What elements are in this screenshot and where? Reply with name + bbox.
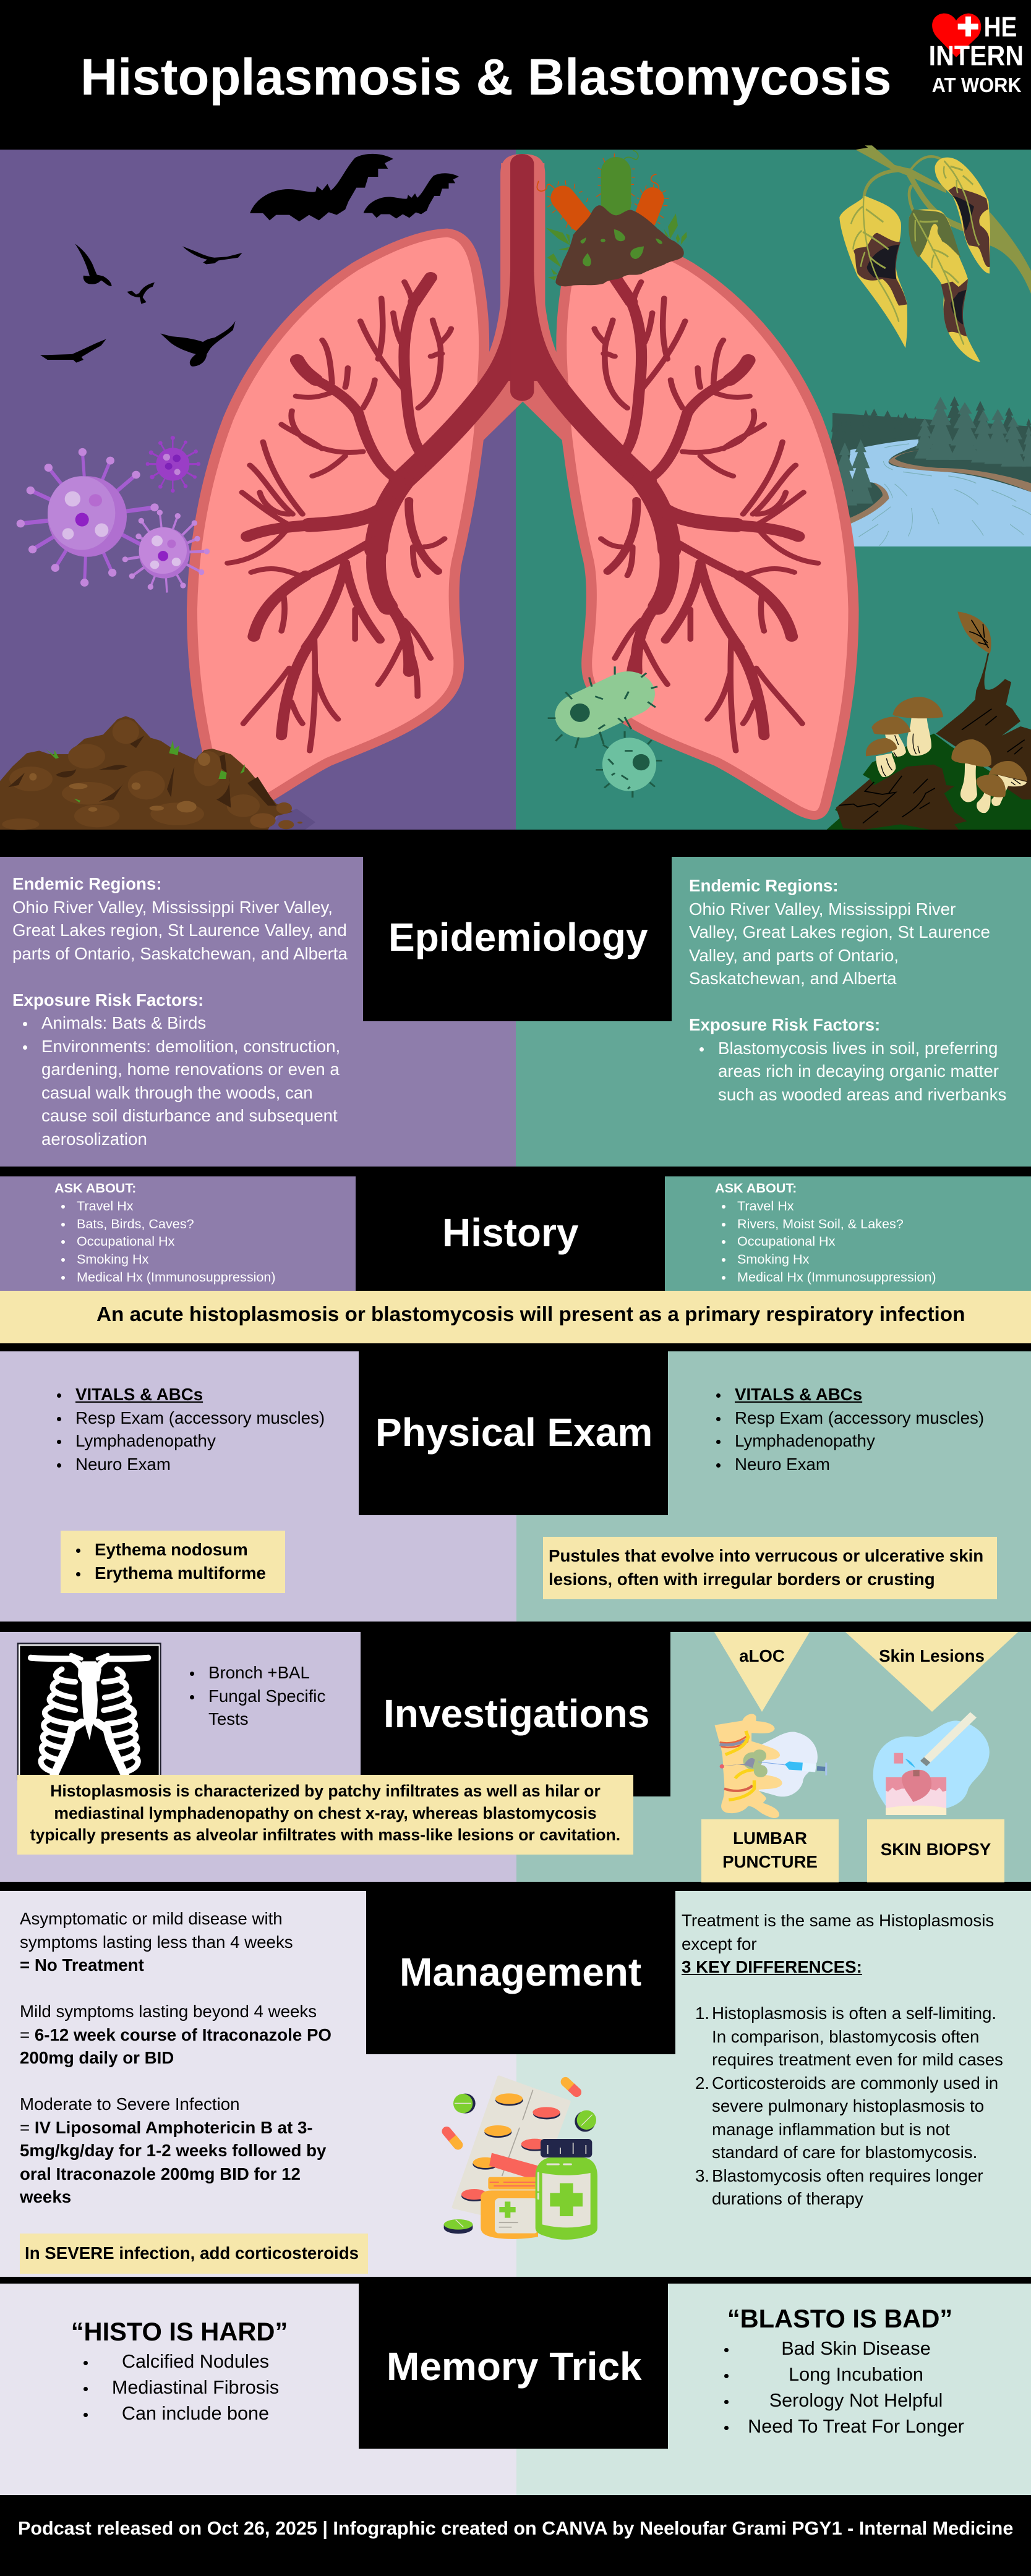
list: bronch and fungal tests (190, 1663, 325, 1728)
callout: histoplasmosis skin: Eythema nodosum (95, 1540, 248, 1559)
mushrooms on log (827, 611, 1031, 830)
teal bacterium round (596, 731, 662, 797)
trachea (511, 164, 533, 391)
grass tufts (46, 740, 245, 802)
heading: Investigations: Investigations (383, 1691, 649, 1736)
trachea sheath (500, 154, 545, 305)
list: Blasto is bad: Serology Not Helpful (769, 2390, 943, 2411)
list: physical exam right: Neuro Exam (735, 1454, 830, 1474)
panel: memory trick right (516, 2284, 1031, 2495)
orange bacterium left (563, 198, 580, 219)
text: histoplasmosis management: 5mg/kg/day for 1-2 weeks followed by (20, 2141, 326, 2160)
green bacterium (571, 172, 661, 204)
text: epidemiology histoplasmosis: cause soil disturbance and subsequent (41, 1106, 338, 1125)
logo: The Intern at Work (929, 11, 1024, 97)
icon: chest x-ray (17, 1643, 161, 1780)
text: epidemiology blastomycosis: Blastomycosis lives in soil, preferring (718, 1039, 998, 1057)
text: epidemiology blastomycosis: Exposure Risk Factors: (689, 1015, 880, 1034)
box: Lumbar Puncture: PUNCTURE (722, 1852, 818, 1871)
left lung body (192, 233, 484, 815)
heading box: Investigations (361, 1632, 670, 1796)
callout: blastomycosis skin: lesions, often with irregular borders or crusting (549, 1569, 935, 1589)
panel: memory trick left (0, 2284, 516, 2495)
text: epidemiology histoplasmosis: Animals: Bats & Birds (41, 1013, 206, 1032)
text: epidemiology histoplasmosis (12, 874, 348, 1149)
orange pill bottle (488, 2177, 537, 2190)
text: histoplasmosis management: Asymptomatic or mild disease with (20, 1909, 283, 1928)
heading box: History (356, 1176, 665, 1291)
third virus (122, 509, 210, 593)
list: physical exam right: Lymphadenopathy (735, 1431, 875, 1450)
footer: Podcast released on Oct 26, 2025 | Infographic created on CANVA by Neeloufar Grami PGY1 - Internal Medicine (18, 2518, 1013, 2539)
panel: epidemiology left (0, 857, 516, 1167)
text: history histoplasmosis: Travel Hx (77, 1198, 134, 1214)
text: epidemiology histoplasmosis: casual walk through the woods, can (41, 1083, 313, 1102)
panel: investigations left (0, 1632, 516, 1882)
heading box: Memory Trick (359, 2284, 668, 2449)
heading: Memory Trick: Memory Trick (387, 2344, 642, 2389)
callout: severe infection: In SEVERE infection, add corticosteroids (25, 2243, 359, 2263)
birds and viruses (17, 244, 242, 593)
birds (40, 244, 242, 367)
list: physical exam right (716, 1385, 984, 1474)
text: histoplasmosis management: = No Treatment (20, 1955, 144, 1975)
box: Lumbar Puncture (701, 1819, 839, 1882)
text: epidemiology blastomycosis (689, 876, 1006, 1104)
list: Histo is hard: Mediastinal Fibrosis (112, 2377, 279, 2398)
list: physical exam right: VITALS & ABCs (735, 1385, 862, 1404)
heading box: Epidemiology (363, 857, 672, 1021)
text: histoplasmosis management: weeks (20, 2187, 71, 2206)
bats (250, 154, 459, 221)
list: Histo is hard: Calcified Nodules (122, 2351, 269, 2372)
text: epidemiology histoplasmosis: aerosolization (41, 1129, 147, 1149)
text: blastomycosis management: Histoplasmosis is often a self-limiting. (712, 2004, 996, 2023)
heading: Physical Exam: Physical Exam (375, 1410, 652, 1455)
callout: severe infection (20, 2234, 368, 2274)
hero illustration (0, 145, 1031, 830)
label: Skin Lesions: Skin Lesions (879, 1646, 985, 1665)
heap (555, 205, 684, 286)
list: physical exam left: Neuro Exam (75, 1454, 171, 1474)
panel: management left (0, 1891, 516, 2277)
text: blastomycosis management: Treatment is the same as Histoplasmosis (682, 1911, 994, 1930)
loose pills (453, 2094, 476, 2114)
list: Histo is hard (83, 2351, 279, 2424)
list: physical exam right: Resp Exam (accessory muscles) (735, 1408, 984, 1427)
text: blastomycosis management: durations of therapy (712, 2189, 863, 2208)
leaf 3 (935, 158, 990, 273)
text: blastomycosis management: In comparison, blastomycosis often (712, 2026, 979, 2046)
list: physical exam left: Resp Exam (accessory muscles) (75, 1408, 325, 1427)
small dark virus (146, 436, 200, 493)
text: epidemiology blastomycosis: Valley, and parts of Ontario, (689, 946, 899, 964)
text: histoplasmosis management (20, 1909, 332, 2206)
list: bronch and fungal tests: Tests (208, 1709, 249, 1728)
text: history blastomycosis (715, 1180, 936, 1285)
triangle: skin lesions (845, 1632, 1018, 1712)
text: history histoplasmosis: Bats, Birds, Caves? (77, 1216, 194, 1231)
list: bronch and fungal tests: Bronch +BAL (208, 1663, 310, 1682)
text: epidemiology histoplasmosis: Ohio River Valley, Mississippi River Valley, (12, 898, 333, 916)
text: blastomycosis management: 2. (695, 2073, 709, 2092)
river and forest (830, 396, 1031, 546)
text: history histoplasmosis: ASK ABOUT: (54, 1180, 136, 1196)
text: epidemiology blastomycosis: Valley, Great Lakes region, St Laurence (689, 922, 990, 942)
triangle: aLOC (714, 1632, 810, 1712)
logo: The Intern at Work: AT WORK (932, 74, 1022, 97)
heading: History: History (442, 1210, 579, 1255)
leaf 1 (839, 196, 907, 348)
text: epidemiology histoplasmosis: gardening, home renovations or even a (41, 1060, 340, 1079)
right lung mirrored (522, 163, 853, 815)
text: blastomycosis management (682, 1911, 1003, 2208)
text: epidemiology blastomycosis: Ohio River Valley, Mississippi River (689, 899, 956, 919)
icon: lumbar puncture spine and skin biopsy (715, 1712, 990, 1818)
callout: histoplasmosis skin: Erythema multiforme (95, 1563, 266, 1583)
text: blastomycosis management: Corticosteroids are commonly used in (712, 2073, 998, 2092)
list: Blasto is bad: Need To Treat For Longer (748, 2416, 964, 2437)
logo: The Intern at Work: INTERN (929, 40, 1024, 72)
red box lid (489, 2153, 538, 2180)
leaf 2 (909, 209, 980, 362)
callout: imaging findings: Histoplasmosis is characterized by patchy infiltrates as well as hilar or (50, 1782, 601, 1800)
text: history blastomycosis: Medical Hx (Immunosuppression) (737, 1269, 936, 1285)
text: blastomycosis management: severe pulmonary histoplasmosis to (712, 2096, 984, 2115)
box: Skin Biopsy (867, 1819, 1004, 1882)
river water (843, 440, 1031, 546)
blighted leaves on branch (839, 145, 1031, 362)
text: blastomycosis management: 3 KEY DIFFERENCES: (682, 1957, 862, 1976)
label: aLOC: aLOC (739, 1646, 785, 1665)
heading box: Management (366, 1891, 675, 2054)
text: epidemiology blastomycosis: such as wooded areas and riverbanks (718, 1084, 1006, 1104)
lungs (192, 154, 853, 815)
text: epidemiology histoplasmosis: parts of Ontario, Saskatchewan, and Alberta (12, 943, 348, 963)
callout: acute presentation (0, 1291, 1031, 1343)
callout: histoplasmosis skin (61, 1531, 285, 1593)
orange bacterium right (645, 199, 652, 218)
callout: blastomycosis skin (543, 1537, 997, 1599)
text: histoplasmosis management: = 6-12 week course of Itraconazole PO (20, 2025, 332, 2044)
callout: imaging findings: mediastinal lymphadenopathy on chest x-ray, whereas blastomycosis (54, 1804, 597, 1822)
text: history histoplasmosis: Smoking Hx (77, 1251, 148, 1267)
text: histoplasmosis management: symptoms lasting less than 4 weeks (20, 1932, 293, 1951)
bronchus sheath (477, 163, 523, 446)
text: epidemiology blastomycosis: Endemic Regions: (689, 876, 839, 895)
text: epidemiology blastomycosis: Saskatchewan, and Alberta (689, 969, 897, 988)
text: histoplasmosis management: 200mg daily or BID (20, 2048, 174, 2067)
heading box: Physical Exam (359, 1351, 668, 1515)
skin biopsy (873, 1715, 990, 1815)
text: epidemiology histoplasmosis: Great Lakes region, St Laurence Valley, and (12, 920, 347, 940)
dirt mound left (0, 716, 315, 830)
text: epidemiology histoplasmosis: Environments: demolition, construction, (41, 1036, 340, 1056)
list: Blasto is bad (724, 2338, 964, 2437)
panel: hero background right (516, 150, 1031, 830)
panel: hero background left (0, 150, 516, 830)
heading: Blasto is bad: “BLASTO IS BAD” (727, 2304, 952, 2333)
text: histoplasmosis management: Mild symptoms lasting beyond 4 weeks (20, 2002, 317, 2021)
soil heap with organisms (537, 150, 687, 286)
small rocks (250, 802, 302, 829)
panel: management right (516, 1891, 1031, 2277)
text: blastomycosis management: 3. (695, 2166, 709, 2185)
text: blastomycosis management: 1. (695, 2004, 709, 2023)
list: Blasto is bad: Bad Skin Disease (781, 2338, 931, 2359)
box: Lumbar Puncture: LUMBAR (733, 1829, 807, 1848)
syringe (758, 1761, 827, 1775)
text: history blastomycosis: Smoking Hx (737, 1251, 809, 1267)
text: blastomycosis management: except for (682, 1934, 757, 1953)
panel: history left (0, 1176, 516, 1291)
text: history blastomycosis: ASK ABOUT: (715, 1180, 797, 1196)
text: blastomycosis management: standard of care for blastomycosis. (712, 2143, 977, 2162)
list: physical exam left (57, 1385, 325, 1474)
text: history histoplasmosis: Medical Hx (Immunosuppression) (77, 1269, 276, 1285)
text: histoplasmosis management: oral Itraconazole 200mg BID for 12 (20, 2164, 301, 2183)
panel: epidemiology right (516, 857, 1031, 1167)
carina taper (480, 272, 565, 381)
panel: physical exam right (516, 1351, 1031, 1622)
text: histoplasmosis management: Moderate to Severe Infection (20, 2094, 240, 2114)
heading: Management: Management (400, 1950, 641, 1994)
list: bronch and fungal tests: Fungal Specific (208, 1686, 325, 1705)
big virus (17, 448, 159, 587)
heading: Epidemiology: Epidemiology (388, 915, 648, 959)
box: Skin Biopsy: SKIN BIOPSY (881, 1840, 991, 1859)
left bronchial tree (228, 278, 516, 751)
title: Histoplasmosis & Blastomycosis (80, 48, 892, 106)
text: history blastomycosis: Rivers, Moist Soil, & Lakes? (737, 1216, 904, 1231)
callout: blastomycosis skin: Pustules that evolve into verrucous or ulcerative skin (549, 1546, 983, 1565)
panel: investigations right (516, 1632, 1031, 1882)
list: physical exam left: VITALS & ABCs (75, 1385, 203, 1404)
left river bank (843, 483, 889, 524)
panel: physical exam left (0, 1351, 516, 1622)
text: epidemiology blastomycosis: areas rich in decaying organic matter (718, 1061, 999, 1081)
heading: Histo is hard: “HISTO IS HARD” (71, 2317, 288, 2346)
lumbar spine (715, 1714, 818, 1818)
blister pack (453, 2077, 569, 2224)
text: blastomycosis management: requires treatment even for mild cases (712, 2050, 1003, 2069)
icon: medication pills and bottles (442, 2076, 597, 2240)
text: histoplasmosis management: = IV Liposomal Amphotericin B at 3- (20, 2118, 313, 2136)
callout text: An acute histoplasmosis or blastomycosis will present as a primary respiratory infection (96, 1303, 965, 1326)
text: epidemiology histoplasmosis: Endemic Regions: (12, 874, 162, 893)
text: history histoplasmosis (54, 1180, 276, 1285)
leaves behind heap (546, 213, 687, 280)
green bacterium rod (548, 666, 657, 748)
text: blastomycosis management: Blastomycosis often requires longer (712, 2166, 983, 2185)
hairs (547, 153, 669, 229)
green bottle (541, 2139, 592, 2157)
panel: history right (516, 1176, 1031, 1291)
right river bank (889, 451, 1031, 492)
text: history blastomycosis: Travel Hx (737, 1198, 794, 1214)
text: history blastomycosis: Occupational Hx (737, 1233, 835, 1249)
list: Blasto is bad: Long Incubation (789, 2364, 923, 2385)
list: Histo is hard: Can include bone (122, 2403, 269, 2424)
callout: imaging findings: typically presents as alveolar infiltrates with mass-like lesions or cavitation. (30, 1826, 620, 1844)
list: physical exam left: Lymphadenopathy (75, 1431, 216, 1450)
text: blastomycosis management: manage inflammation but is not (712, 2119, 950, 2139)
text: epidemiology histoplasmosis: Exposure Risk Factors: (12, 990, 203, 1009)
text: history histoplasmosis: Occupational Hx (77, 1233, 174, 1249)
logo: The Intern at Work: HE (984, 11, 1017, 43)
callout: imaging findings (17, 1775, 633, 1855)
